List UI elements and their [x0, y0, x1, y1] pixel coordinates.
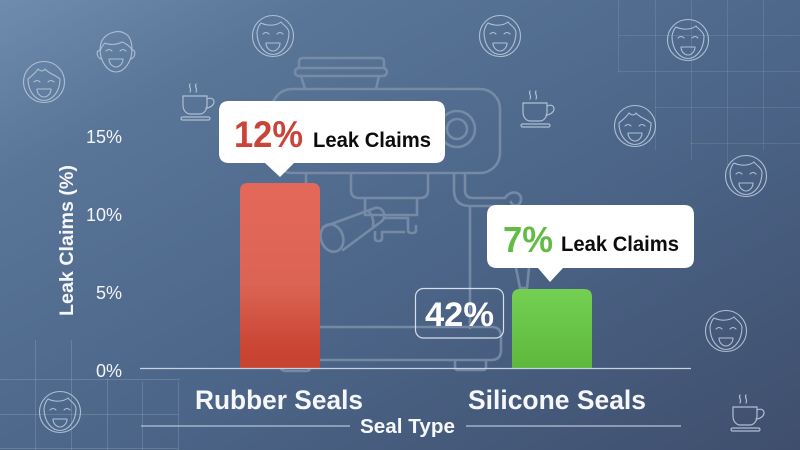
callout: silicone seals	[487, 205, 694, 282]
y axis tick labels: 0%	[96, 361, 122, 381]
category label: rubber seals: Rubber Seals	[195, 385, 363, 415]
background grid: bottom left	[0, 340, 180, 450]
coffee cup icons	[181, 84, 764, 431]
icon: face 1	[24, 62, 64, 102]
x axis title: Seal Type	[360, 416, 455, 438]
icon: coffee cup left	[181, 84, 214, 120]
bar: rubber seals	[240, 183, 320, 368]
icon: coffee cup middle	[521, 91, 554, 127]
y axis title: Leak Claims (%)	[57, 165, 78, 316]
y axis tick labels	[86, 127, 122, 381]
category label: silicone seals: Silicone Seals	[468, 385, 646, 415]
icon: face 3	[252, 16, 294, 56]
bar: silicone seals	[512, 289, 592, 368]
callout: silicone seals: Leak Claims	[561, 233, 679, 256]
callout: rubber seals	[219, 101, 445, 177]
callout: rubber seals: Leak Claims	[313, 129, 431, 152]
espresso machine outline	[272, 58, 529, 371]
y axis tick labels: 10%	[86, 205, 122, 225]
icon: face 9	[40, 392, 80, 432]
icon: face 5	[668, 20, 708, 60]
icon: face 6	[614, 106, 656, 146]
icon: face 8	[706, 310, 746, 352]
y axis tick labels: 15%	[86, 127, 122, 147]
callout: rubber seals: 12%	[234, 114, 303, 155]
callout: silicone seals: 7%	[503, 219, 553, 260]
icon: face 7	[726, 156, 766, 196]
icon: face 4	[480, 16, 520, 56]
x axis line	[140, 368, 691, 370]
icon: coffee cup right	[731, 395, 764, 431]
reduction badge: 42%: 42%	[425, 296, 494, 334]
y axis tick labels: 5%	[96, 283, 122, 303]
background grid: top right	[618, 0, 800, 165]
reduction badge: 42%	[416, 288, 504, 338]
icon: face 2	[97, 32, 135, 72]
